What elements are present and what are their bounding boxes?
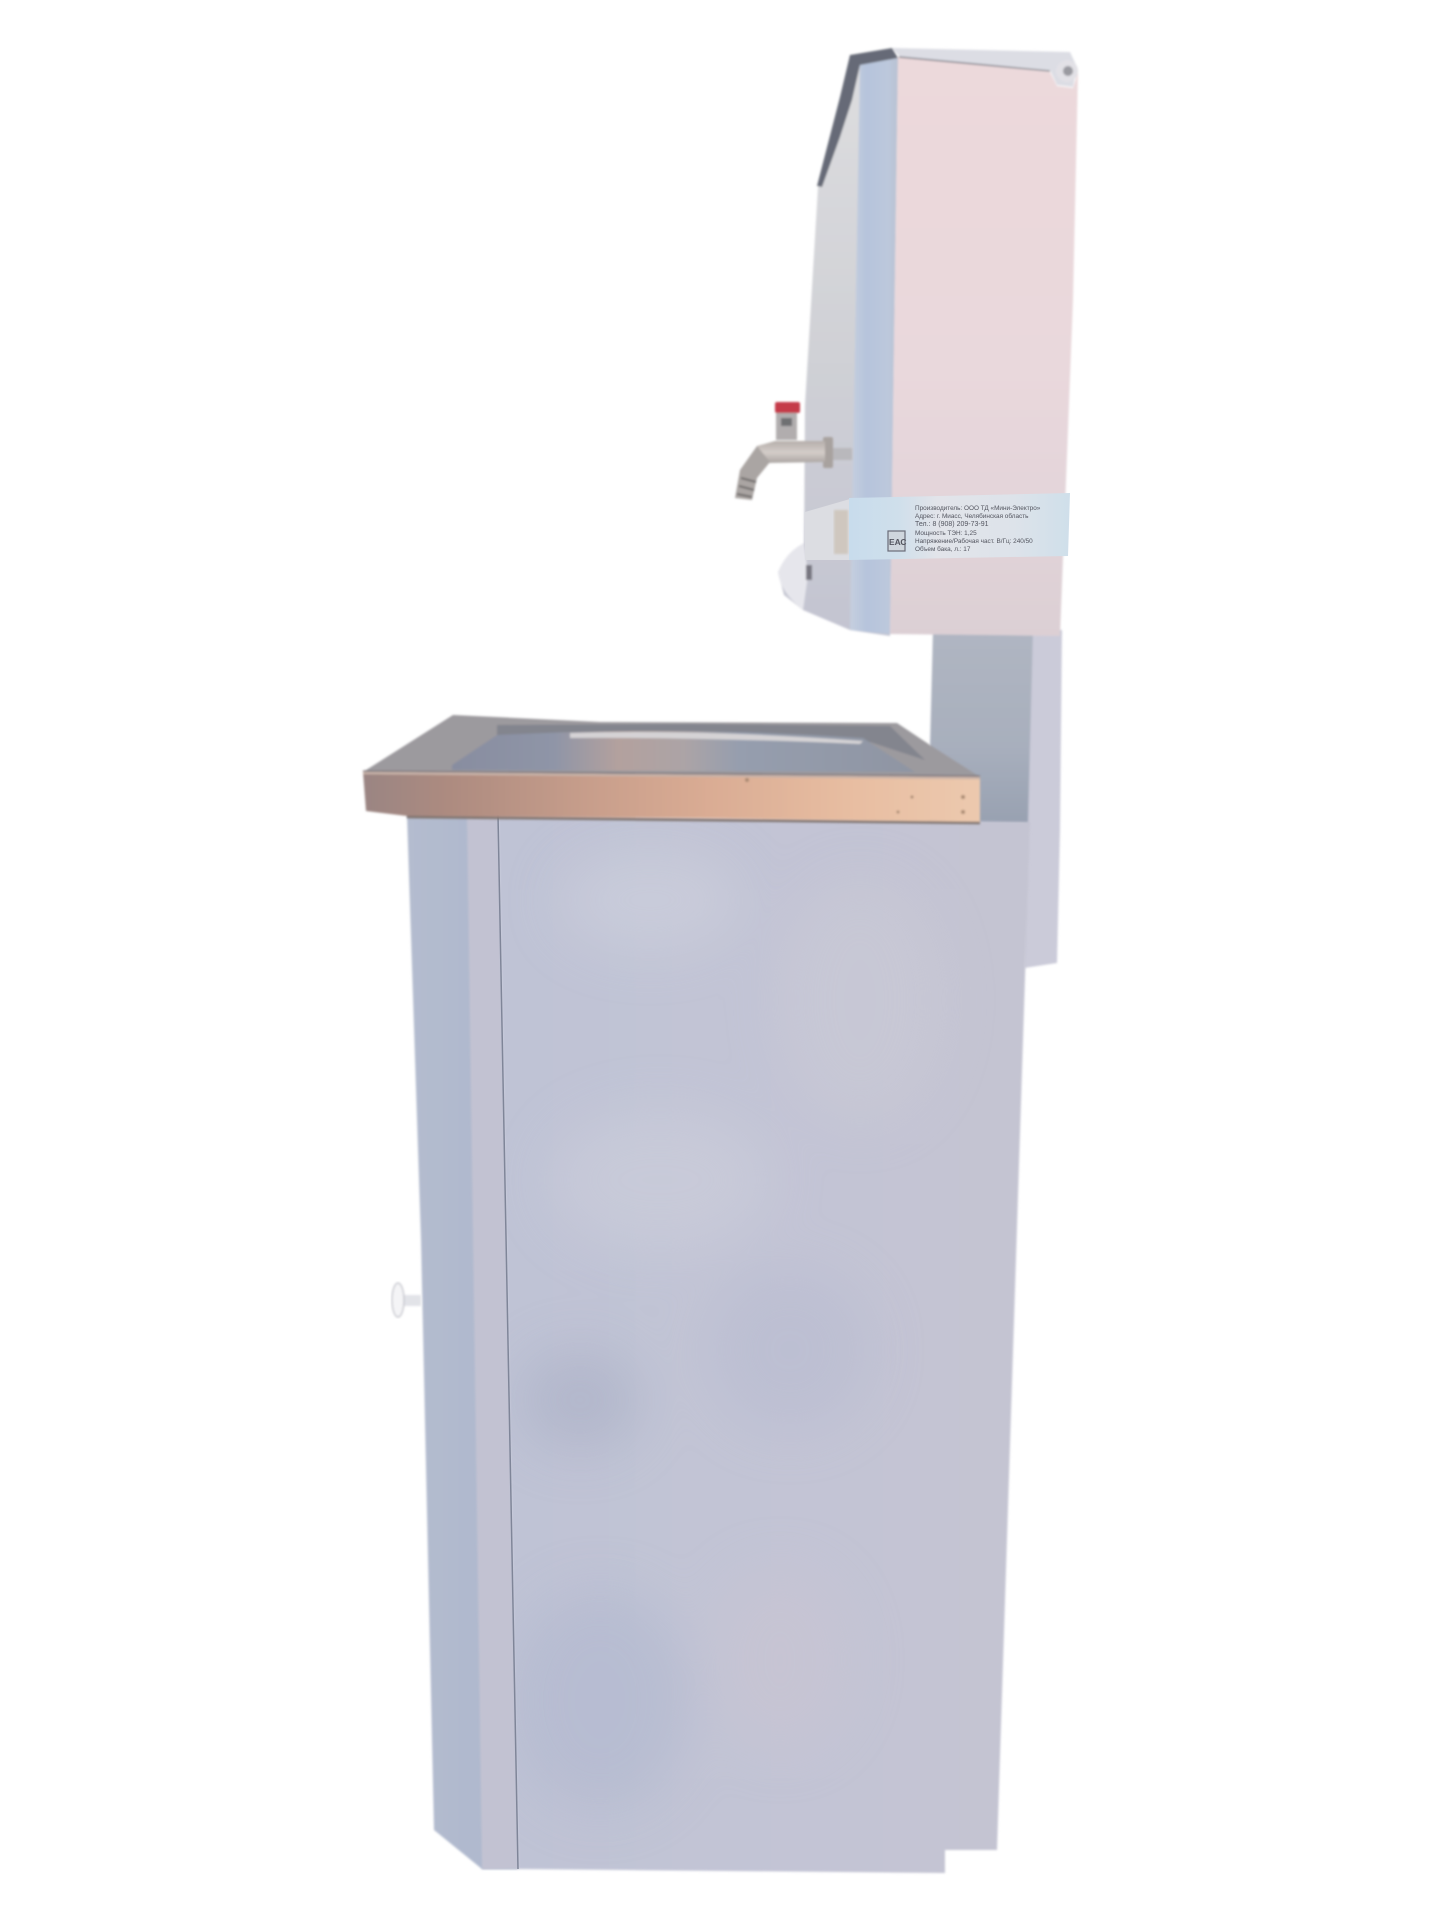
label text: Мощность ТЭН: 1,25	[915, 530, 977, 537]
tank pink front face	[890, 57, 1078, 636]
tank blue edge strip	[850, 58, 898, 634]
sticker label	[805, 493, 1070, 560]
cabinet side panel	[407, 815, 518, 1869]
back pillar	[928, 630, 1062, 968]
door seam	[498, 815, 518, 1869]
tank lid top band	[892, 48, 1077, 87]
small dark mark on bag	[806, 565, 812, 580]
copper front rim	[363, 772, 980, 822]
product photo: washbasin cabinet with water tank	[362, 46, 1078, 1874]
sink back wall shadow	[497, 724, 925, 760]
mark on label: ЕАС	[889, 537, 906, 547]
water tap	[735, 402, 852, 500]
mark on label	[888, 531, 906, 551]
translucent tape	[805, 499, 850, 560]
tank left side face	[778, 60, 898, 636]
lid screw	[1056, 60, 1078, 82]
label text: Тел.: 8 (908) 209-73-91	[915, 521, 989, 528]
label text: Напряжение/Рабочая част. В/Гц: 240/50	[915, 537, 1033, 545]
tank dark lid edge	[817, 48, 898, 187]
door knob	[392, 1283, 421, 1317]
side panel lighter strip	[467, 815, 518, 1869]
rim rivets	[745, 778, 965, 814]
label text: Адрес: г. Миасс, Челябинская область	[915, 512, 1029, 520]
label text: Производитель: ООО ТД «Мини-Электро»	[915, 505, 1041, 512]
sink	[363, 715, 980, 823]
cabinet	[392, 815, 1030, 1873]
label text	[915, 505, 1041, 553]
cabinet door front	[498, 815, 1030, 1873]
bowl highlight	[570, 732, 863, 744]
water tank	[778, 48, 1078, 636]
mottled door surface	[534, 1360, 662, 1776]
sink bowl	[452, 731, 915, 772]
label text: Объем бака, л.: 17	[915, 545, 971, 553]
small tan sticker	[834, 510, 848, 554]
white bag under the tank	[778, 543, 808, 610]
sink top deck	[363, 715, 980, 777]
